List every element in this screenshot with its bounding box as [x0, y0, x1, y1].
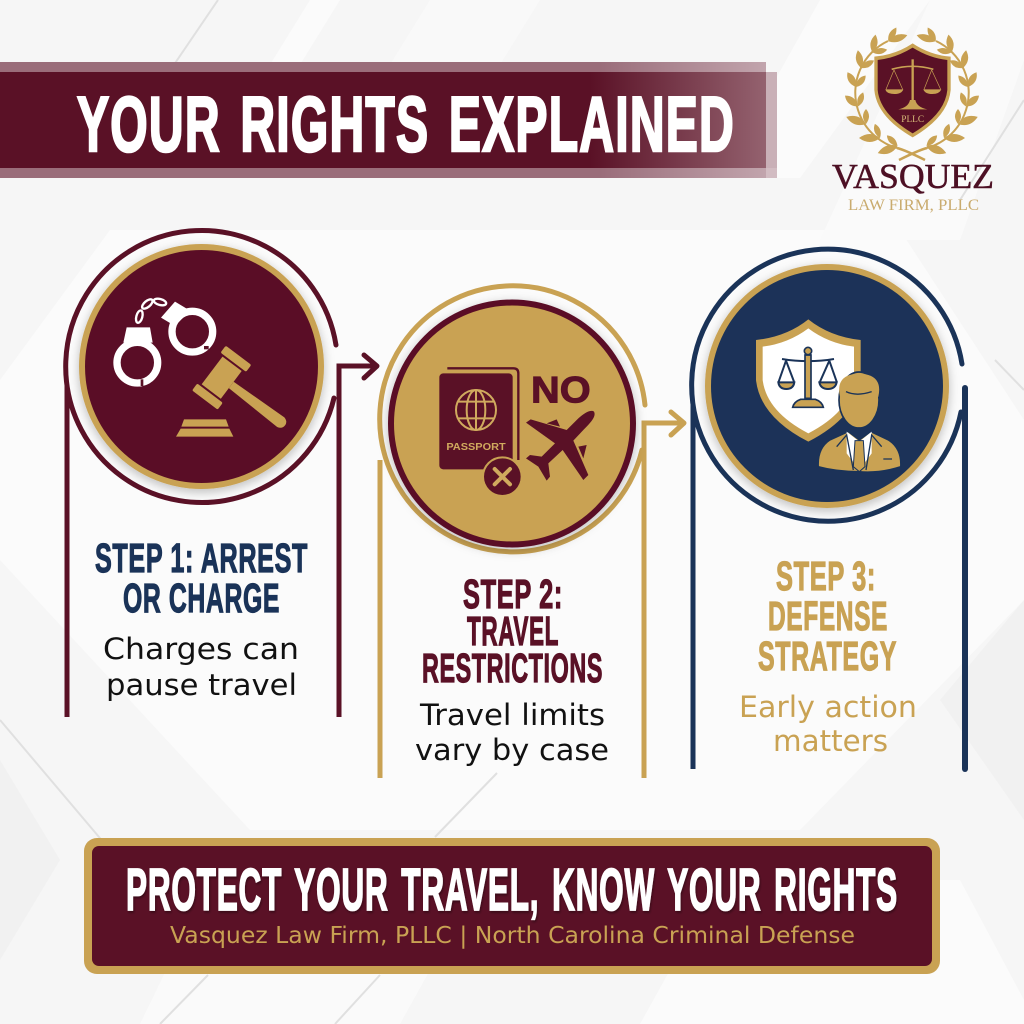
- callout banner: [84, 838, 940, 974]
- step 1 text: Charges can: [103, 632, 299, 666]
- logo wordmark: VASQUEZ: [832, 157, 994, 196]
- step 2 text: vary by case: [415, 733, 609, 767]
- step 1 heading: STEP 1: ARREST: [95, 535, 308, 581]
- step 1 heading: OR CHARGE: [123, 575, 280, 621]
- step 3 heading: STEP 3:: [776, 553, 876, 599]
- icon: shield and attorney: [756, 319, 901, 472]
- step 2 heading: TRAVEL: [467, 608, 559, 654]
- connector frame step 2: [380, 286, 684, 778]
- callout subtext: Vasquez Law Firm, PLLC | North Carolina Criminal Defense: [170, 923, 855, 949]
- logo: Vasquez Law Firm: [832, 26, 994, 214]
- step 3 text: matters: [773, 724, 888, 758]
- step 3 heading: STRATEGY: [758, 633, 897, 679]
- step 1 heading: [95, 535, 308, 621]
- icon: shield with scales: [874, 43, 951, 137]
- icon: passport and no flying: PASSPORT: [446, 442, 506, 453]
- step 1 medallion: [82, 247, 321, 486]
- icon: passport and no flying: NO: [531, 369, 591, 411]
- step 2 text: [415, 698, 609, 767]
- step 3 text: [739, 690, 917, 758]
- step 2 medallion: [391, 302, 633, 544]
- step 1 text: pause travel: [106, 668, 297, 702]
- step 3 heading: [758, 553, 897, 679]
- icon: handcuffs and gavel: [117, 297, 302, 448]
- step 2 heading: RESTRICTIONS: [422, 645, 603, 691]
- step 3 heading: DEFENSE: [768, 593, 888, 639]
- connector frame step 1: [66, 230, 377, 717]
- step 3 text: Early action: [739, 690, 917, 724]
- icon: laurel wreath: [843, 26, 981, 160]
- step 2 heading: STEP 2:: [463, 571, 563, 617]
- panel: step 2: [380, 286, 684, 778]
- icon: passport and no flying: [439, 368, 595, 496]
- connector frame step 3: [692, 249, 965, 769]
- step 3 medallion: [708, 267, 946, 505]
- panel: step 1: [66, 230, 377, 717]
- step 2 heading: [422, 571, 603, 691]
- step 1 text: [103, 632, 299, 702]
- step 2 text: Travel limits: [419, 698, 605, 732]
- logo subtitle: LAW FIRM, PLLC: [848, 197, 979, 214]
- icon: shield with scales: PLLC: [901, 115, 924, 125]
- panel: step 3: [692, 249, 965, 769]
- title banner: [0, 62, 777, 178]
